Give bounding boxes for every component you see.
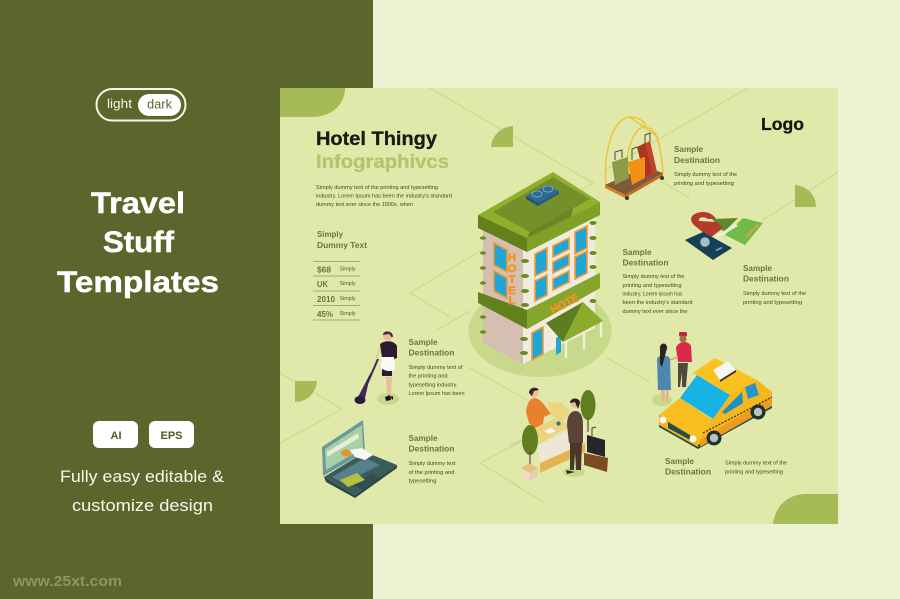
stats table: Simply <box>340 296 356 302</box>
text: destination centre: printing and typesetting <box>622 283 682 289</box>
shape: quarter circle left <box>295 381 317 402</box>
title: Infographivcs <box>316 152 449 173</box>
heading: travel stuff templates: Templates <box>57 266 219 299</box>
intro text <box>316 185 452 208</box>
text: destination laptop <box>408 433 456 484</box>
intro text: Simply dummy text of the printing and typesetting <box>316 185 438 191</box>
text: destination centre: Destination <box>622 258 668 268</box>
badge: AI <box>93 421 138 448</box>
text: destination laptop: Simply dummy text <box>408 461 456 467</box>
text: destination top: printing and typesetting <box>674 181 734 187</box>
text: destination housekeeper: Lorem Ipsum has been <box>408 391 464 397</box>
text: destination taxi: Simply dummy text of the <box>725 460 787 466</box>
heading: travel stuff templates: Stuff <box>103 226 175 259</box>
sign: vertical hotel: H <box>508 252 516 264</box>
illustration: laptop booking <box>322 420 397 498</box>
stats table <box>313 229 367 320</box>
text: destination right <box>743 263 806 306</box>
text: destination laptop: Sample <box>408 433 438 443</box>
watermark: www.25xt.com <box>12 573 122 590</box>
stats table: Simply <box>317 229 343 239</box>
stats table: 2010 <box>317 294 335 304</box>
stats table: Dummy Text <box>317 240 367 250</box>
text: destination top: Simply dummy text of the <box>674 172 737 178</box>
sign: vertical hotel <box>508 252 517 307</box>
text: destination top <box>674 144 737 187</box>
stats table: $68 <box>317 264 331 274</box>
logo: Logo <box>761 114 804 134</box>
text: destination top: Sample <box>674 144 703 154</box>
stats table: UK <box>317 279 329 289</box>
title: Hotel Thingy <box>316 129 437 150</box>
stats table: Simply <box>340 266 356 272</box>
text: destination housekeeper: Destination <box>408 348 454 358</box>
text: destination right: Sample <box>743 263 772 273</box>
panel: infographic card <box>280 88 838 524</box>
shape: quarter circle top <box>491 126 513 147</box>
text: destination housekeeper <box>408 337 464 397</box>
illustration: taxi <box>659 358 772 449</box>
text: editable note: customize design <box>72 496 213 515</box>
shape: bottom right blob <box>773 494 838 524</box>
sign: vertical hotel: T <box>509 274 516 286</box>
text: destination right: printing and typesetting <box>743 300 802 306</box>
illustration: passport and cards <box>685 212 763 260</box>
text: destination right: Simply dummy text of the <box>743 291 806 297</box>
text: destination taxi: printing and typesetting <box>725 470 783 476</box>
heading: travel stuff templates <box>57 187 219 299</box>
toggle: light dark: dark <box>147 96 172 112</box>
title <box>316 129 449 173</box>
badge: EPS: EPS <box>160 430 183 442</box>
text: destination centre: industry. Lorem Ipsum has <box>622 292 683 298</box>
background: right side <box>373 0 900 599</box>
text: editable note <box>60 467 225 515</box>
badge: AI: AI <box>110 430 122 442</box>
sign: vertical hotel: L <box>509 295 516 307</box>
sign: horizontal hotel: HOTE <box>549 292 581 317</box>
toggle: light dark <box>96 89 186 120</box>
illustration: luggage cart <box>605 117 664 200</box>
illustration: couple and porter <box>652 332 692 406</box>
intro text: industry. Lorem Ipsum has been the industry's standard <box>316 194 452 200</box>
illustration: reception desk <box>521 388 608 481</box>
text: destination taxi: Destination <box>665 466 711 476</box>
text: destination housekeeper: the printing and <box>408 374 448 380</box>
text: editable note: Fully easy editable & <box>60 467 225 486</box>
illustration: hotel building <box>468 172 612 377</box>
stats table: 45% <box>317 309 333 319</box>
text: destination right: Destination <box>743 274 789 284</box>
text: destination housekeeper: typesetting industry. <box>408 382 458 388</box>
text: destination laptop: Destination <box>408 444 454 454</box>
panel: left sidebar <box>0 0 373 599</box>
shape: quarter circle right <box>795 185 816 207</box>
sign: vertical hotel: O <box>508 263 517 275</box>
shape: top left blob <box>280 88 345 117</box>
text: destination housekeeper: Simply dummy text of <box>408 365 463 371</box>
text: destination centre <box>622 247 692 315</box>
text: destination laptop: of the printing and <box>408 470 454 476</box>
text: destination centre: Simply dummy text of the <box>622 274 684 280</box>
text: destination centre: dummy text ever since the <box>622 309 688 315</box>
text: destination taxi <box>665 456 787 476</box>
badge: EPS <box>149 421 194 448</box>
text: destination laptop: typesetting <box>408 478 436 484</box>
stats table: Simply <box>340 311 356 317</box>
illustration: housekeeper <box>354 331 399 405</box>
heading: travel stuff templates: Travel <box>91 187 185 220</box>
sign: vertical hotel: E <box>508 285 516 297</box>
toggle: light dark: light <box>107 96 132 111</box>
text: destination taxi: Sample <box>665 456 694 466</box>
stats table: Simply <box>340 281 356 287</box>
text: destination centre: been the industry's standard <box>622 300 692 306</box>
text: destination centre: Sample <box>622 247 652 257</box>
intro text: dummy text ever since the 1500s, when <box>316 202 413 208</box>
text: destination housekeeper: Sample <box>408 337 438 347</box>
text: destination top: Destination <box>674 155 720 165</box>
